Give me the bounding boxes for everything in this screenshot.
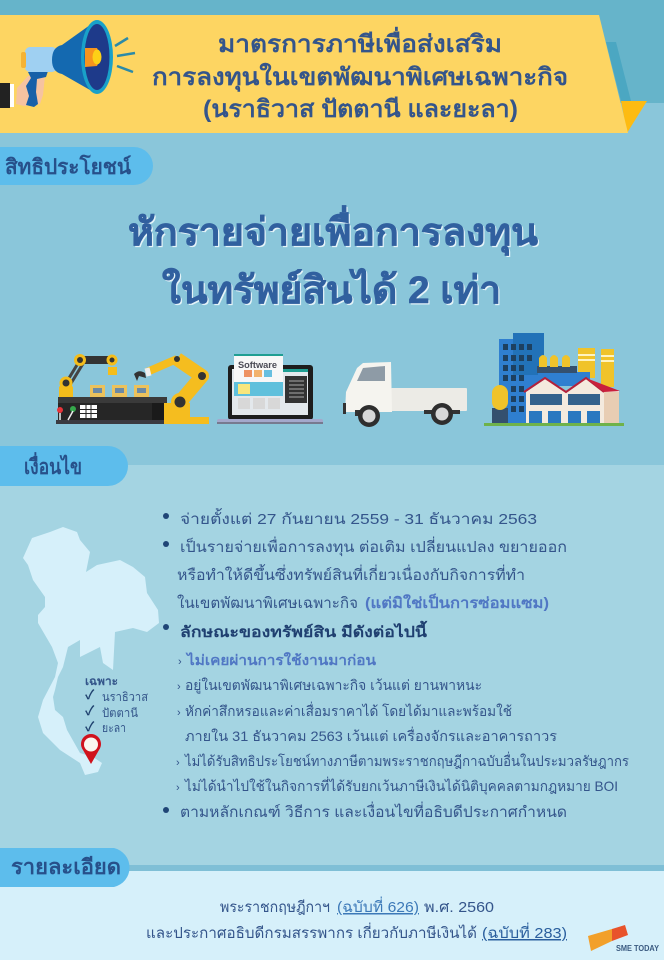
icon: megaphone <box>0 20 135 108</box>
province list: ✓ <box>85 703 95 718</box>
heading: details pill: รายละเอียด <box>11 855 121 879</box>
logo: SME Today: SME TODAY <box>616 944 660 953</box>
condition list: ลักษณะของทรัพย์สิน มีดังต่อไปนี้ <box>180 620 428 641</box>
legal references: และประกาศอธิบดีกรมสรรพากร เกี่ยวกับภาษีเงินได้ <box>146 922 477 942</box>
icon: factory and office building <box>484 333 624 426</box>
condition list: › <box>178 656 182 668</box>
province list: ปัตตานี <box>102 706 138 720</box>
icon: laptop with software window <box>217 354 323 424</box>
panel: header banner <box>0 15 647 133</box>
heading: main benefit statement: หักรายจ่ายเพื่อการลงทุน <box>130 206 540 258</box>
legal references <box>146 896 567 942</box>
province list: เฉพาะ <box>85 676 118 688</box>
map of Thailand <box>23 527 159 775</box>
heading: main benefit statement: ในทรัพย์สินได้ 2 เท่า <box>164 270 502 314</box>
pin <box>81 734 101 764</box>
legal references: พระราชกฤษฎีกาฯ <box>220 899 330 916</box>
condition list: อยู่ในเขตพัฒนาพิเศษเฉพาะกิจ เว้นแต่ ยานพาหนะ <box>185 677 482 694</box>
province list: ✓ <box>85 687 95 702</box>
condition list: หรือทำให้ดีขึ้นซึ่งทรัพย์สินที่เกี่ยวเนื่องกับกิจการที่ทำ <box>177 564 525 584</box>
heading: main benefit statement: หักรายจ่ายเพื่อการลงทุน <box>128 205 538 256</box>
title <box>152 26 568 123</box>
heading: details pill <box>0 848 130 887</box>
condition list: ไม่เคยผ่านการใช้งานมาก่อน <box>185 651 376 668</box>
heading: benefits pill <box>0 147 153 185</box>
condition list: จ่ายตั้งแต่ 27 กันยายน 2559 - 31 ธันวาคม 2563 <box>180 508 537 528</box>
condition list: ในเขตพัฒนาพิเศษเฉพาะกิจ <box>177 594 358 612</box>
panel: details <box>0 848 664 960</box>
condition list: › <box>176 782 180 794</box>
condition list: › <box>177 707 181 719</box>
heading: conditions pill <box>0 446 128 486</box>
condition list: › <box>177 681 181 693</box>
title: การลงทุนในเขตพัฒนาพิเศษเฉพาะกิจ <box>152 62 568 93</box>
province list <box>85 676 149 735</box>
condition list: ภายใน 31 ธันวาคม 2563 เว้นแต่ เครื่องจักรและอาคารถาวร <box>185 727 557 744</box>
icon: white pickup truck <box>343 362 467 427</box>
heading: main benefit statement: ในทรัพย์สินได้ 2 เท่า <box>162 268 501 312</box>
heading: main benefit statement <box>128 205 540 314</box>
legal references: (ฉบับที่ 283) <box>482 922 567 942</box>
legal references: พ.ศ. 2560 <box>424 899 494 916</box>
icon: factory robot arms <box>56 354 209 424</box>
condition list: ไม่ได้นำไปใช้ในกิจการที่ได้รับยกเว้นภาษีเงินได้นิติบุคคลตามกฎหมาย BOI <box>184 777 618 795</box>
title: (นราธิวาส ปัตตานี และยะลา) <box>203 96 518 123</box>
province list: นราธิวาส <box>102 690 149 704</box>
condition list: (แต่มิใช่เป็นการซ่อมแซม) <box>365 593 549 612</box>
icon: laptop with software window: Software <box>238 360 277 370</box>
heading: conditions pill: เงื่อนไข <box>24 451 82 479</box>
province list: ✓ <box>85 719 95 734</box>
heading: benefits pill: สิทธิประโยชน์ <box>5 154 132 179</box>
condition list: หักค่าสึกหรอและค่าเสื่อมราคาได้ โดยได้มาและพร้อมใช้ <box>185 702 512 719</box>
condition list: เป็นรายจ่ายเพื่อการลงทุน ต่อเติม เปลี่ยนแปลง ขยายออก <box>180 536 567 557</box>
legal references: (ฉบับที่ 626) <box>337 896 419 916</box>
panel: conditions <box>0 446 664 870</box>
condition list: ตามหลักเกณฑ์ วิธีการ และเงื่อนไขที่อธิบดีประกาศกำหนด <box>180 801 567 821</box>
title: มาตรการภาษีเพื่อส่งเสริม <box>218 26 502 58</box>
condition list: › <box>176 757 180 769</box>
condition list <box>163 508 629 821</box>
logo: SME Today <box>588 925 660 953</box>
condition list: ไม่ได้รับสิทธิประโยชน์ทางภาษีตามพระราชกฤษฎีกาฉบับอื่นในประมวลรัษฎากร <box>184 752 629 769</box>
province list: ยะลา <box>102 721 126 735</box>
